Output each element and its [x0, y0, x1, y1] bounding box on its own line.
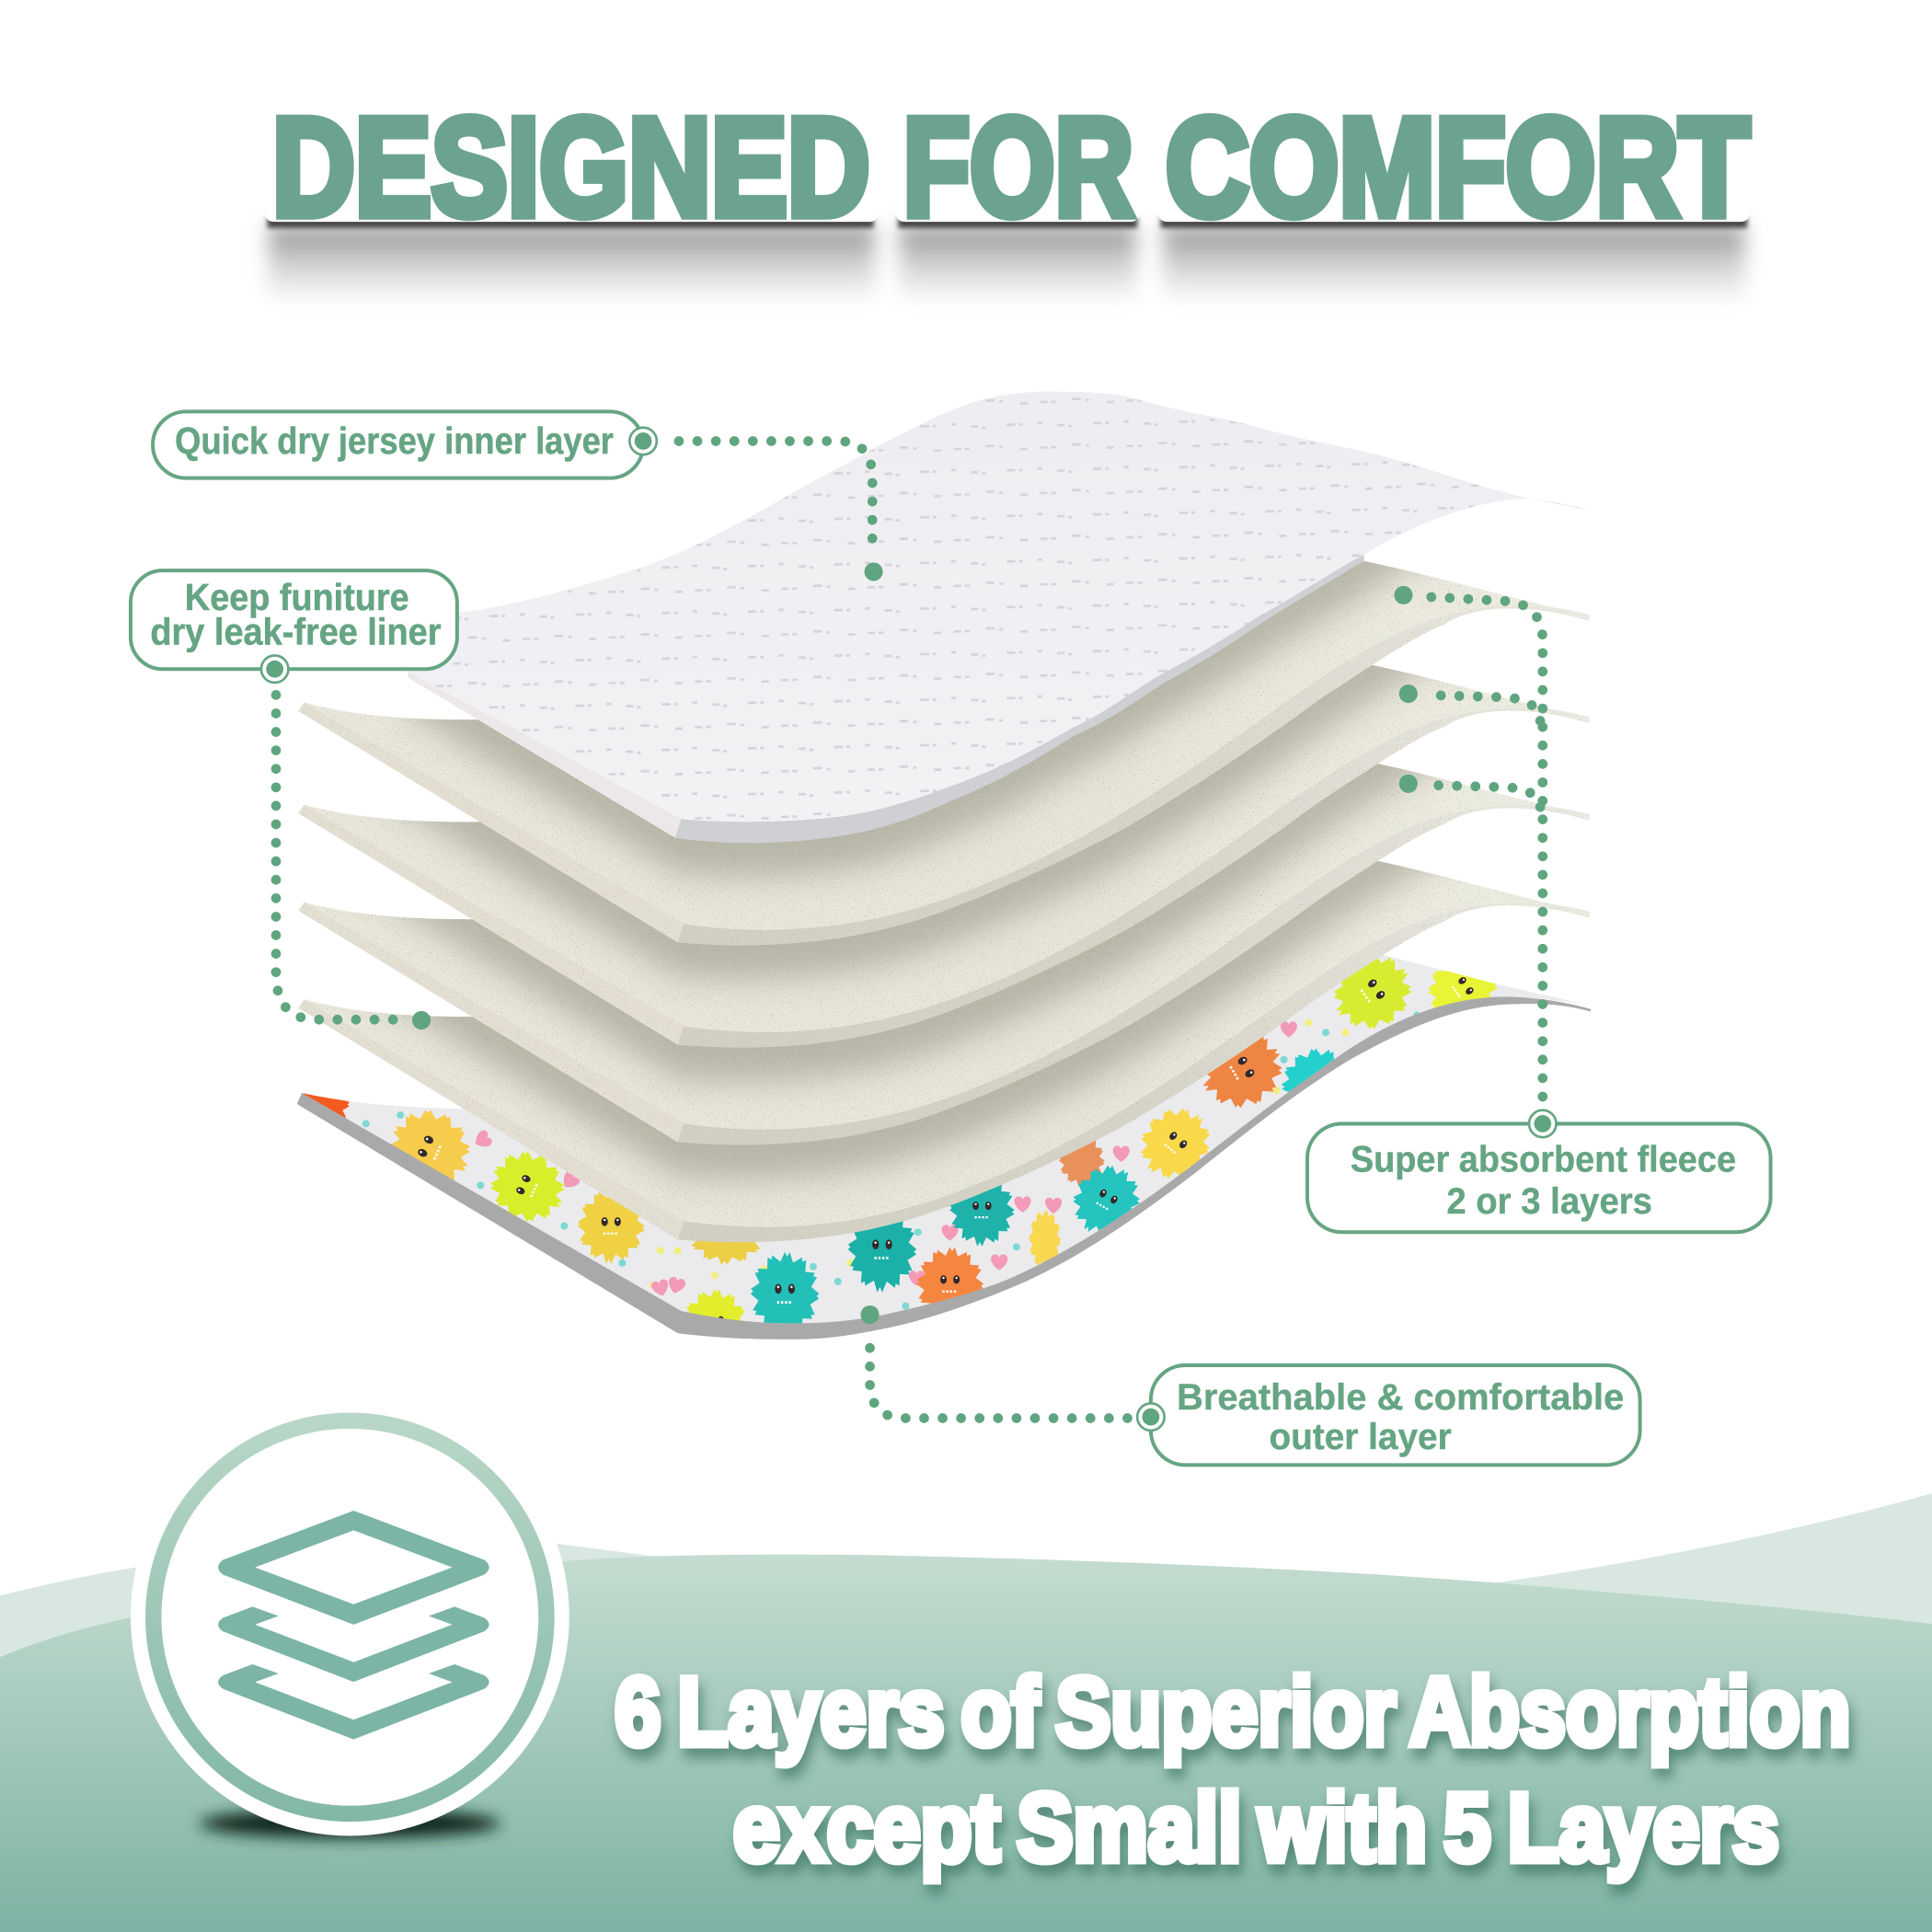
callout: breathable outer layer: Breathable & comfortable: [1177, 1377, 1624, 1418]
bottom background: light back wave: [0, 1493, 1932, 1932]
callout: super absorbent fleece: Super absorbent fleece: [1351, 1140, 1736, 1180]
fleece layer 4: [298, 851, 1590, 1242]
fleece layer 3: [298, 753, 1590, 1144]
grey waterproof edge: [297, 996, 1591, 1340]
title text: FOR: [903, 90, 1133, 246]
badge shadow: [200, 1809, 500, 1838]
badge white disc: [131, 1397, 569, 1836]
fleece layer 1: [298, 554, 1590, 946]
callout: super absorbent fleece: 2 or 3 layers: [1446, 1181, 1652, 1222]
title shadow: [265, 109, 1750, 303]
connector: jersey: [679, 441, 883, 581]
headline: 6 layers of superior absorption: except Small with 5 Layers: [733, 1774, 1779, 1881]
title text: [272, 90, 1750, 246]
callout: leak-free liner: dry leak-free liner: [150, 610, 442, 652]
shadow on fleece layer 1: [400, 559, 1426, 892]
jersey inner layer: [408, 392, 1590, 843]
outer printed layer: [296, 955, 1591, 1340]
shadow on fleece layer 2: [390, 661, 1435, 995]
callout: quick dry jersey: Quick dry jersey inner layer: [175, 420, 614, 462]
pattern monsters: [293, 933, 1516, 1365]
shadow on fleece layer 4: [380, 857, 1443, 1194]
icon: stacked layers: [218, 1511, 489, 1740]
callout: leak-free liner: [131, 570, 457, 683]
connector: outer layer: [860, 1305, 1127, 1419]
connector: leak-free liner: [276, 695, 431, 1029]
title: designed for comfort: [265, 90, 1750, 303]
headline: 6 layers of superior absorption: [615, 1658, 1851, 1881]
bottom background: main wave: [0, 1555, 1932, 1932]
callout: quick dry jersey: [153, 411, 657, 478]
callout: leak-free liner: Keep funiture: [185, 576, 409, 618]
fleece layer 2: [298, 656, 1590, 1048]
shadow on fleece layer 3: [379, 759, 1442, 1098]
badge: layers icon circle: [131, 1397, 569, 1838]
callout: breathable outer layer: [1137, 1365, 1640, 1465]
layered material stack: [293, 392, 1591, 1365]
callout: breathable outer layer: outer layer: [1269, 1417, 1452, 1457]
title text: DESIGNED: [272, 90, 870, 246]
badge ring: [154, 1420, 546, 1813]
pattern dots and hearts: [362, 1012, 1420, 1310]
title text: COMFORT: [1166, 90, 1750, 246]
connector: fleece layers: [1394, 586, 1543, 1097]
callout: super absorbent fleece: [1307, 1110, 1771, 1232]
